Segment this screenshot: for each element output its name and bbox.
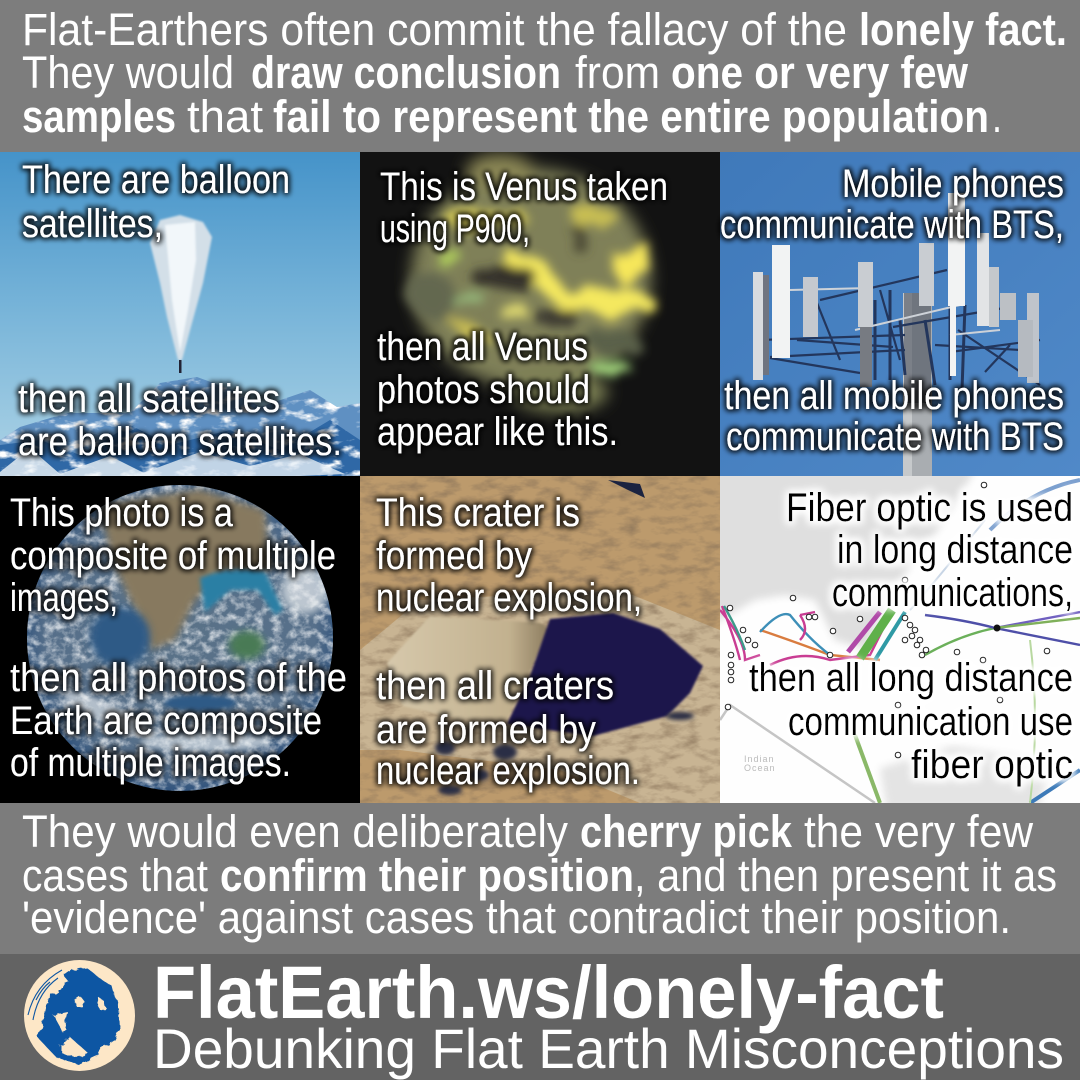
panel caption: nuclear explosion. (376, 749, 640, 793)
panel caption (10, 491, 347, 785)
panel: fiber optic map (712, 470, 1080, 810)
heading text: Flat-Earthers often commit the fallacy of the (22, 4, 847, 55)
photo: BTS tower (720, 152, 1080, 476)
heading text: fail to represent the entire population (273, 91, 989, 142)
panel caption (376, 491, 642, 793)
heading text: from (575, 47, 660, 98)
panel caption: composite of multiple (10, 534, 336, 578)
explanation text: confirm their position (220, 850, 634, 901)
panel caption: then all satellites (18, 377, 280, 421)
heading text: samples (22, 91, 176, 142)
heading text: one or very few (671, 47, 969, 98)
explanation text: They would even deliberately (22, 806, 568, 857)
photo: sand crater (360, 476, 720, 803)
panel: Venus photo (360, 152, 720, 476)
panel caption (749, 486, 1073, 787)
explanation text: the very few (804, 806, 1033, 857)
panel caption: This crater is (376, 491, 580, 535)
panel caption: images, (10, 576, 118, 620)
heading text: . (992, 91, 1002, 142)
panel caption: fiber optic (911, 743, 1073, 787)
panel caption: then all photos of the (10, 656, 347, 700)
panel: mobile phone tower (720, 152, 1080, 476)
panel caption: nuclear explosion, (376, 576, 642, 620)
footer band background (0, 954, 1080, 1080)
explanation text: , and then present it as (634, 850, 1057, 901)
panel caption: photos should (377, 368, 590, 412)
photo: blue marble Earth (0, 476, 360, 803)
panel caption: are balloon satellites. (18, 420, 342, 464)
heading text (22, 4, 1067, 142)
photo: balloon over mountains (0, 152, 360, 476)
panel caption: satellites, (22, 202, 163, 246)
heading text: draw conclusion (251, 47, 561, 98)
heading text: that (187, 91, 263, 142)
explanation text: 'evidence' against cases that contradict their position. (22, 892, 1011, 943)
panel caption: of multiple images. (10, 741, 291, 785)
panel: balloon satellite (0, 152, 360, 476)
explanation text (22, 806, 1057, 943)
bottom text band background (0, 803, 1080, 954)
panel: Earth composite (0, 476, 360, 803)
panel caption: then all craters (376, 664, 614, 708)
panel caption: There are balloon (22, 158, 290, 202)
panel caption: Earth are composite (10, 699, 322, 743)
panel caption: using P900, (380, 207, 530, 251)
top banner background (0, 0, 1080, 152)
photo: submarine cable map (712, 470, 1080, 810)
photo: blurry Venus (360, 152, 720, 476)
explanation text: cherry pick (580, 806, 793, 857)
panel caption: This photo is a (10, 491, 234, 535)
panel caption (18, 158, 342, 464)
heading text: They would (22, 47, 234, 98)
panel caption (720, 162, 1064, 459)
panel: nuclear crater (360, 476, 720, 803)
panel caption: appear like this. (377, 410, 618, 454)
panel caption: formed by (376, 534, 532, 578)
panel caption: are formed by (376, 708, 596, 752)
panel caption (377, 165, 668, 454)
panel caption: then all Venus (377, 325, 588, 369)
footer tagline: Debunking Flat Earth Misconceptions (153, 1017, 1064, 1080)
footer url title: FlatEarth.ws/lonely-fact (153, 951, 944, 1034)
photo: submarine cable map: Indian (744, 754, 775, 764)
explanation text: cases that (22, 850, 208, 901)
photo: submarine cable map: Ocean (744, 763, 776, 773)
logo: flat earth map (24, 960, 135, 1071)
panel caption: This is Venus taken (380, 165, 668, 209)
